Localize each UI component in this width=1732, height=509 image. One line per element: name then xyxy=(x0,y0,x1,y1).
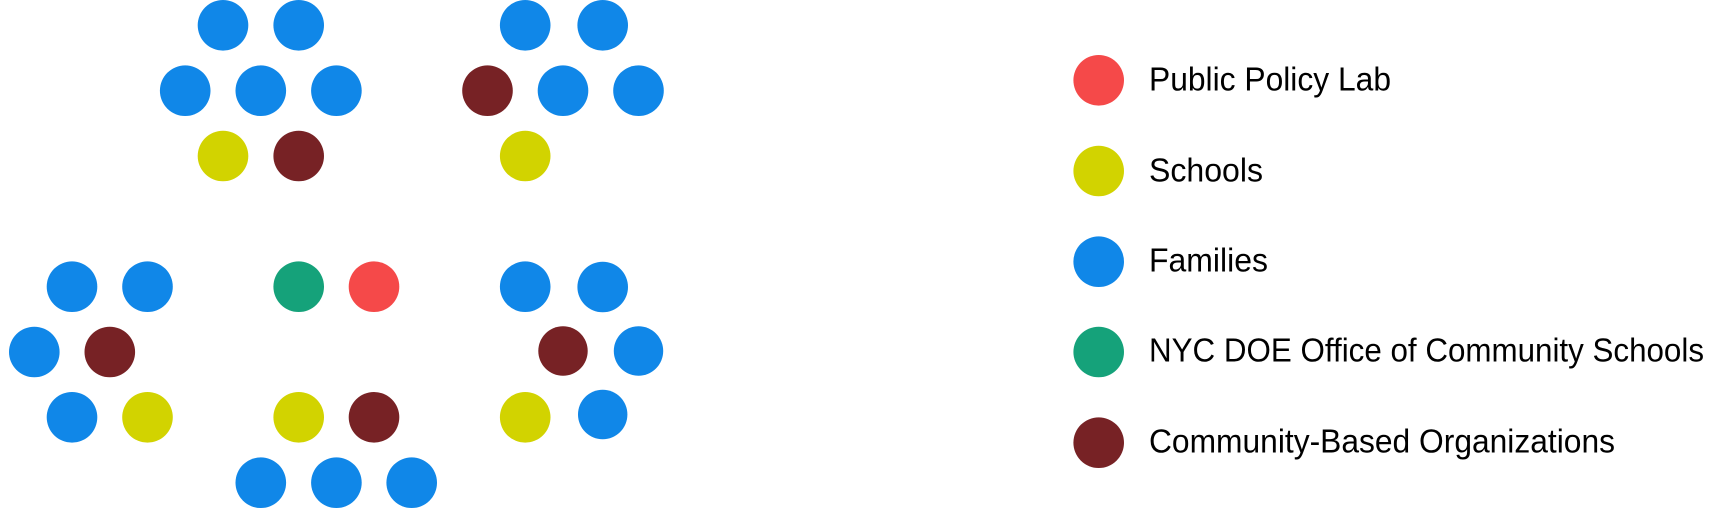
dot cluster: middle right group xyxy=(500,261,663,443)
legend item: Schools xyxy=(1073,146,1263,196)
legend item: Families: Families xyxy=(1149,242,1268,279)
legend item: Community-Based Organizations xyxy=(1073,417,1615,468)
dot cluster: bottom group xyxy=(235,392,437,508)
legend item: NYC DOE Office of Community Schools xyxy=(1073,327,1704,377)
legend item: Public Policy Lab: Public Policy Lab xyxy=(1149,61,1391,98)
legend item: Community-Based Organizations: Community-Based Organizations xyxy=(1149,423,1615,460)
dot cluster: top left group xyxy=(160,0,362,181)
dot cluster: middle left group xyxy=(9,261,173,443)
dot cluster: centre pair xyxy=(273,261,399,312)
legend xyxy=(1073,55,1704,468)
legend item: NYC DOE Office of Community Schools: NYC DOE Office of Community Schools xyxy=(1149,332,1704,369)
legend item: Schools: Schools xyxy=(1149,152,1263,188)
legend item: Public Policy Lab xyxy=(1073,55,1391,106)
legend item: Families xyxy=(1073,236,1268,287)
dot cluster: top right group xyxy=(462,0,664,181)
